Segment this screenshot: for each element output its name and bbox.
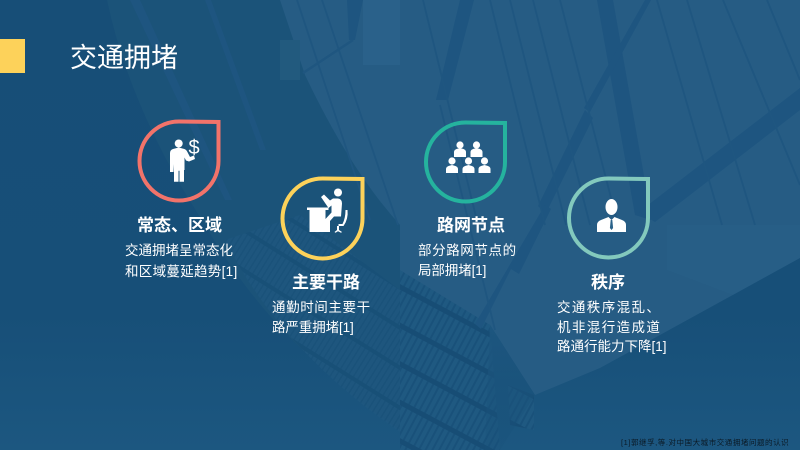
icon: person at desk bbox=[307, 188, 348, 233]
footnote: [1]郭继孚,等.对中国大城市交通拥堵问题的认识 bbox=[621, 437, 789, 447]
heading: 秩序 bbox=[591, 272, 625, 292]
teardrop ring: coral bbox=[140, 122, 219, 201]
description: 通勤时间主要干 bbox=[272, 300, 371, 315]
heading: 常态、区域 bbox=[137, 215, 222, 235]
item: 路网节点 bbox=[418, 122, 517, 278]
heading: 主要干路 bbox=[292, 273, 360, 292]
teardrop ring: teal bbox=[569, 178, 648, 257]
teardrop ring: yellow bbox=[283, 178, 363, 258]
icon: person in suit bbox=[597, 199, 626, 232]
item: 秩序 bbox=[557, 178, 667, 354]
item: 主要干路 bbox=[272, 178, 371, 335]
title marker bbox=[0, 39, 25, 73]
teardrop ring: green bbox=[426, 122, 505, 202]
heading: 路网节点 bbox=[437, 216, 505, 235]
description: 部分路网节点的 bbox=[418, 243, 517, 258]
description: 局部拥堵[1] bbox=[418, 263, 486, 278]
icon: group of people bbox=[446, 141, 490, 173]
icon: businessman with dollar bbox=[170, 137, 200, 182]
icon: businessman with dollar: $ bbox=[188, 137, 200, 159]
title: 交通拥堵 bbox=[70, 43, 178, 73]
description: 交通秩序混乱、 bbox=[557, 299, 661, 315]
description: 路通行能力下降[1] bbox=[557, 339, 667, 354]
description: 交通拥堵呈常态化 bbox=[125, 242, 233, 258]
item: 常态、区域 bbox=[125, 122, 238, 279]
description: 机非混行造成道 bbox=[557, 320, 661, 335]
description: 路严重拥堵[1] bbox=[272, 320, 354, 335]
description: 和区域蔓延趋势[1] bbox=[125, 264, 238, 279]
